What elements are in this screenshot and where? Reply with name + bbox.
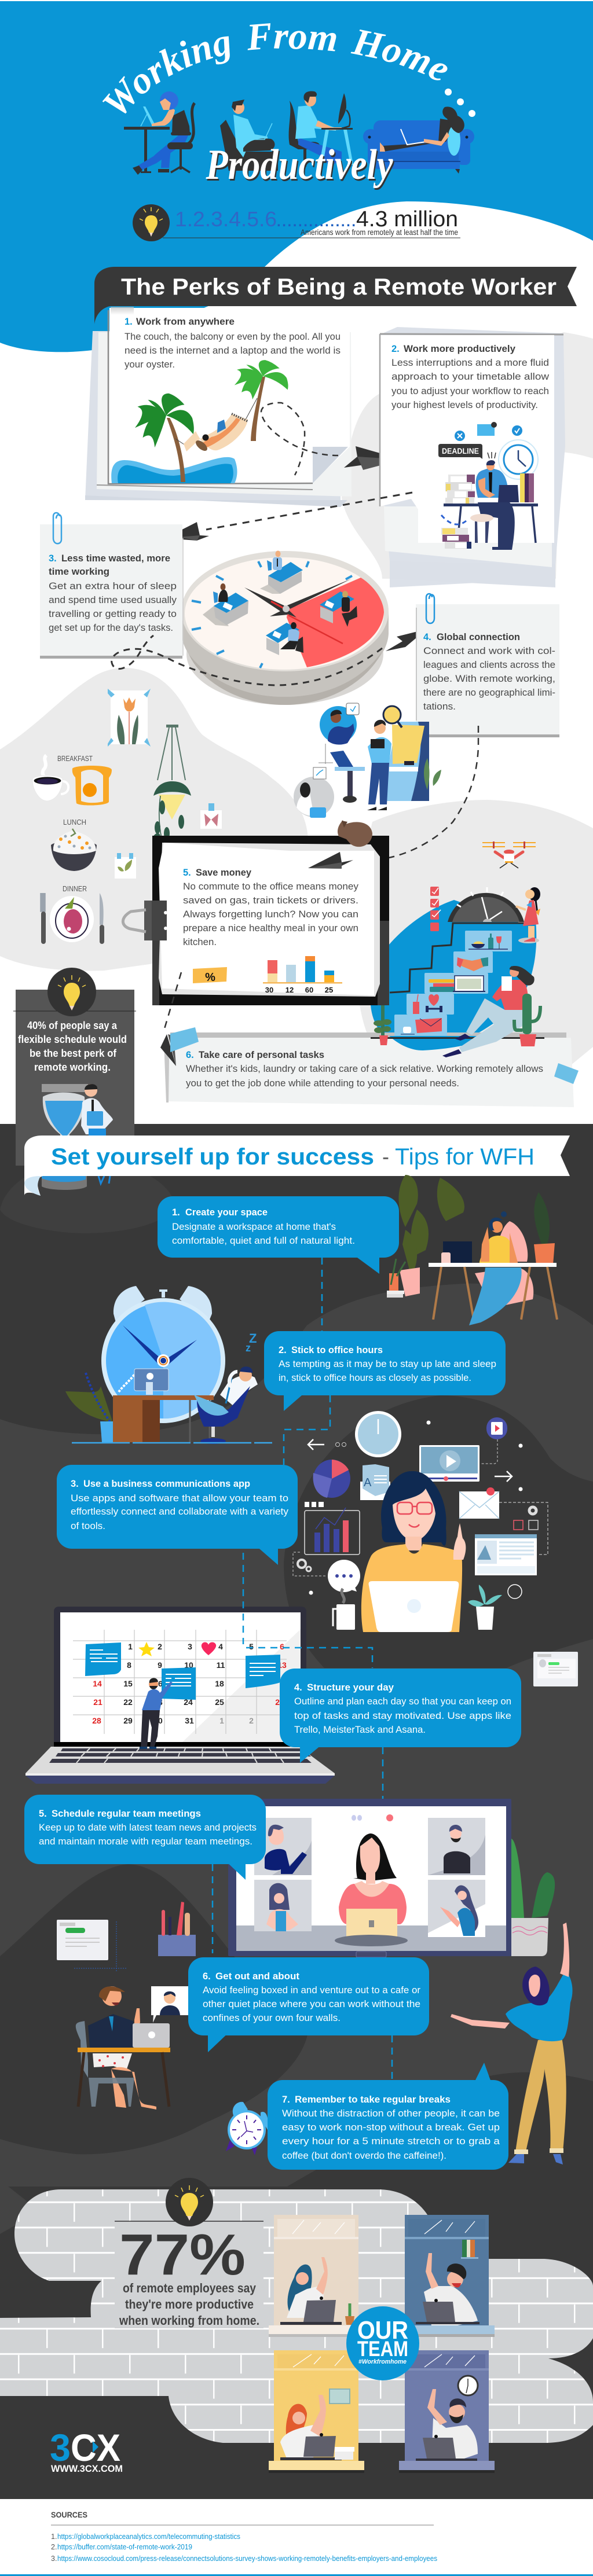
dashed path to perk 3 — [206, 493, 412, 530]
speech bubble: tip 4 structure your day: top of tasks and stay motivated. Use apps like — [294, 1711, 511, 1721]
calendar numbers: 9 — [158, 1660, 162, 1670]
calendar numbers: 4 — [218, 1642, 223, 1651]
illustration: woman at desk — [387, 1175, 557, 1325]
logo: 3CX: CX — [71, 2426, 120, 2469]
illustration: cactus pot — [511, 1839, 555, 1956]
stat: 4.3 million Americans — [133, 204, 460, 241]
dashed connector tip 1 to tip 2 — [321, 1258, 323, 1331]
sources list — [51, 2510, 437, 2563]
speech bubble: tip 6 get out and about: 6. — [203, 1971, 211, 1982]
calendar numbers: 30 — [153, 1716, 163, 1725]
body text: leagues and clients across the — [423, 660, 555, 670]
figure: man on chair with laptop — [220, 100, 278, 171]
sources list: https://www.cosocloud.com/press-release/connectsolutions-survey-shows-working-remotely-benefits-employers-and-employees — [57, 2555, 437, 2563]
speech bubble: tip 3 business communications app: Use apps and software that allow your team to — [71, 1493, 288, 1504]
plants — [374, 994, 540, 1046]
text — [18, 1020, 127, 1073]
calendar numbers: 31 — [185, 1716, 194, 1725]
stat: 77 percent productive: 77% — [119, 2222, 246, 2287]
title: Productively: Productively — [207, 143, 394, 190]
speech bubble: tip 6 get out and about: Avoid feeling boxed in and venture out to a cafe or — [203, 1985, 421, 1996]
man at calendar — [140, 1678, 173, 1749]
body text: Always forgetting lunch? Now you can — [183, 909, 358, 920]
video player — [419, 1417, 507, 1482]
stat: 4.3 million Americans: Americans work from remotely at least half the time — [301, 228, 458, 237]
body text: and spend time used usually — [49, 595, 177, 605]
body text: Less interruptions and a more fluid — [391, 358, 549, 368]
speech bubble: tip 3 business communications app: of tools. — [71, 1521, 105, 1531]
poster: butterfly — [200, 803, 222, 829]
badge: our team: OUR — [357, 2316, 408, 2345]
top blue header shape — [0, 1, 593, 352]
illustration: alarm clock and reclining man: z — [246, 1342, 251, 1354]
speech bubble: tip 7 regular breaks: Remember to take regular breaks — [295, 2094, 451, 2105]
body text: globe. With remote working, — [423, 674, 555, 684]
speech bubble: tip 4 structure your day: Outline and plan each day so that you can keep on — [294, 1696, 511, 1707]
gauge — [448, 887, 524, 922]
illustration: four remote workers — [124, 91, 474, 175]
panel: perk 5 save money clipboard — [123, 820, 389, 1005]
calendar numbers: 1 — [219, 1716, 224, 1725]
panel: perk 6 personal tasks — [160, 1027, 579, 1107]
illustration: pencil cup and chat card — [57, 1902, 196, 1972]
speech bubble: tip 5 team meetings: 5. — [39, 1809, 47, 1819]
body text: travelling or getting ready to — [49, 609, 177, 619]
calendar numbers: 18 — [215, 1679, 224, 1688]
icon: paper clip — [426, 594, 434, 623]
dashed connector tip 5 to tip 6 — [212, 1864, 213, 1953]
tile: top left — [254, 1818, 312, 1875]
calendar numbers: 8 — [127, 1660, 131, 1670]
meal: lunch: LUNCH — [63, 818, 86, 826]
illustration: video meeting monitor — [228, 1799, 511, 1957]
background shape: faint lower-left strip — [0, 2180, 41, 2234]
girl at gauge — [516, 887, 540, 943]
calendar numbers: 3 — [188, 1642, 192, 1651]
heading: 6. — [186, 1050, 194, 1060]
illustration: woman with apps — [293, 1411, 548, 1632]
newspaper envelope: A — [364, 1476, 372, 1489]
speech bubble: tip 2 stick to office hours: in, stick to office hours as closely as possible. — [279, 1373, 471, 1383]
binder clip — [123, 901, 167, 940]
blue blob lower part over shelf — [389, 1036, 501, 1050]
speech bubble: tip 7 regular breaks: coffee (but don't overdo the caffeine!). — [282, 2151, 446, 2161]
dashed path to perk 6 — [163, 972, 181, 1032]
dashed connector tip 6 to tip 7 — [391, 2035, 393, 2080]
body text — [423, 646, 555, 712]
heading: Work more productively — [404, 344, 516, 354]
speech bubble: tip 3 business communications app — [57, 1465, 298, 1565]
meal: dinner — [41, 885, 104, 944]
panel: perk 4 global connection — [416, 594, 559, 737]
shelf items — [401, 934, 508, 1034]
poster: tulip — [108, 689, 151, 747]
sticky note: percent — [193, 967, 227, 984]
speech bubble icon — [328, 1560, 360, 1592]
dashed connector tip 2 to tip 3 — [284, 1395, 330, 1465]
poster: leaf — [115, 853, 136, 879]
logo: 3CX: 3 — [50, 2426, 71, 2469]
bar chart: 60 — [305, 986, 313, 994]
calendar numbers: 13 — [277, 1660, 287, 1670]
body text: No commute to the office means money — [183, 881, 359, 892]
background blob: dark behind woman — [284, 1395, 593, 1668]
cat on clipboard — [338, 820, 372, 847]
title: Working From Home: Working From Home — [102, 23, 447, 113]
calendar numbers: 28 — [92, 1716, 101, 1725]
speech bubble: tip 5 team meetings: and maintain morale with regular team meetings. — [39, 1836, 252, 1847]
meal: breakfast — [32, 755, 112, 806]
body text: your highest levels of productivity. — [391, 400, 538, 410]
sticky note: percent: % — [205, 971, 215, 984]
text: 40% of people say a — [27, 1020, 118, 1031]
sources list: SOURCES — [51, 2510, 87, 2519]
speech bubble: tip 7 regular breaks — [268, 2063, 508, 2170]
speech bubble: tip 3 business communications app: Use a business communications app — [83, 1479, 250, 1489]
heading: Work from anywhere — [136, 317, 235, 327]
dashed path under clock — [112, 635, 382, 685]
heading banner: perks — [94, 267, 577, 324]
body text — [391, 358, 549, 410]
icon: heart — [202, 1642, 216, 1655]
body text: there are no geographical limi- — [423, 688, 555, 698]
calendar numbers: 27 — [275, 1697, 284, 1707]
calendar numbers: 14 — [93, 1679, 102, 1688]
body text — [49, 581, 177, 633]
dashed path to next perk — [261, 403, 338, 475]
arrow: paper plane to perk 4 — [386, 629, 427, 651]
checklist — [430, 887, 441, 931]
background blob: dark lower right — [0, 2072, 593, 2499]
keyboard — [49, 1748, 312, 1763]
clock hands — [244, 579, 352, 644]
clock ticks — [192, 561, 352, 668]
meal: dinner: DINNER — [63, 885, 87, 893]
illustration: man at deadline desk — [438, 422, 538, 550]
speech bubble: tip 6 get out and about: confines of your own four walls. — [203, 2013, 341, 2023]
speech bubble: tip 7 regular breaks: 7. — [282, 2094, 290, 2105]
background blob: grey left — [0, 668, 308, 971]
bar chart: 12 — [285, 986, 294, 994]
heading banner: tips for WFH — [24, 1136, 570, 1196]
tile: bottom right — [428, 1880, 485, 1937]
icon: star — [138, 1642, 155, 1656]
speech bubble: tip 2 stick to office hours — [264, 1331, 506, 1411]
dashed connector tip 4 to tip 5 — [265, 1747, 383, 1812]
dashed path to perk 5 — [352, 726, 478, 860]
calendar grid — [73, 1630, 287, 1734]
body text: need is the internet and a laptop and the world is — [125, 346, 341, 356]
shelf panels — [394, 931, 512, 1036]
stat: 4.3 million Americans: 1.2.3.4.5.6 — [175, 207, 277, 231]
illustration: hourglass and man — [42, 1084, 113, 1157]
text: flexible schedule would — [18, 1034, 127, 1045]
footer strip — [0, 2574, 593, 2576]
woman sitting — [442, 966, 535, 1057]
body text: approach to your timetable allow — [391, 372, 549, 382]
body text: you to get the job done while attending to your personal needs. — [186, 1078, 459, 1089]
speech bubble: tip 4 structure your day: 4. — [294, 1682, 302, 1693]
speech bubble: tip 3 business communications app: effortlessly connect and collaborate with a variety — [71, 1506, 289, 1517]
body text — [125, 332, 341, 370]
heading: 5. — [183, 868, 191, 878]
bar chart: 30 — [265, 986, 273, 994]
illustration: waving woman — [451, 1923, 573, 2165]
sources list: https://globalworkplaceanalytics.com/telecommuting-statistics — [57, 2533, 240, 2541]
window: beige woman — [269, 2215, 366, 2334]
bar chart — [263, 956, 342, 994]
speech bubble: tip 5 team meetings — [24, 1795, 266, 1880]
body text — [183, 881, 359, 947]
stat: 77 percent productive: when working from home. — [119, 2313, 259, 2328]
heading banner: perks: The Perks of Being a Remote Worker — [121, 274, 557, 300]
pie chart — [313, 1460, 350, 1498]
heading: 4. — [423, 632, 431, 642]
stat: 77 percent productive: they're more productive — [125, 2297, 254, 2312]
woman with glasses — [361, 1471, 466, 1632]
body text: tations. — [423, 701, 456, 712]
heading: 2. — [391, 344, 400, 354]
body text: you to adjust your workflow to reach — [391, 386, 549, 396]
badge: our team: #Workfromhome — [358, 2358, 407, 2365]
body text: Get an extra hour of sleep — [49, 581, 177, 591]
heading: Save money — [196, 868, 252, 878]
shelf base line — [371, 1037, 544, 1039]
speech bubble: tip 1 create your space — [158, 1196, 399, 1274]
calendar numbers: 25 — [215, 1697, 224, 1707]
speech bubble: tip 1 create your space: Designate a workspace at home that's — [172, 1222, 336, 1232]
brick wall cloud — [0, 2189, 593, 2443]
logo: 3CX — [50, 2426, 123, 2474]
speech bubble: tip 4 structure your day: Trello, MeisterTask and Asana. — [294, 1725, 426, 1735]
window: yellow woman — [269, 2350, 364, 2470]
calendar numbers: 21 — [93, 1697, 103, 1707]
icon: paper clip — [53, 513, 61, 543]
window: blue man — [405, 2215, 495, 2334]
newspaper envelope — [360, 1464, 390, 1500]
stat: 77 percent productive: of remote employees say — [123, 2281, 257, 2295]
icon: light bulb — [47, 968, 96, 1016]
speech bubble: tip 7 regular breaks: every hour for a 5 minute stretch or to grab a — [282, 2136, 500, 2147]
heading: time working — [49, 567, 109, 577]
calendar numbers: 2 — [249, 1716, 254, 1725]
sources list: https://buffer.com/state-of-remote-work-2019 — [57, 2543, 192, 2551]
background blob: grey right of paper two — [342, 332, 593, 579]
speech bubble: tip 1 create your space: comfortable, quiet and full of natural light. — [172, 1236, 355, 1246]
body text: The couch, the balcony or even by the pool. All you — [125, 332, 341, 342]
stair line — [390, 923, 524, 993]
arrow: paper plane to perk 6 origin — [308, 852, 353, 869]
calendar numbers: 16 — [153, 1679, 163, 1688]
heading banner: tips for WFH: Tips for WFH — [395, 1144, 535, 1170]
calendar numbers: 24 — [184, 1697, 193, 1707]
panel: perk 2 work more productively — [206, 327, 565, 587]
speech bubble: tip 3 business communications app: 3. — [71, 1479, 79, 1489]
heading: Less time wasted, more — [61, 553, 170, 564]
speech bubble: tip 1 create your space: 1. — [172, 1207, 180, 1218]
illustration: beach and hammock — [111, 360, 288, 483]
tile: bottom left — [254, 1880, 312, 1931]
chart box — [305, 1502, 360, 1555]
icon: light bulb — [166, 2178, 213, 2226]
text: be the best perk of — [30, 1048, 117, 1059]
meal: lunch — [51, 818, 97, 871]
illustration: blue blob behind stairs — [371, 900, 536, 1050]
speech bubble: tip 4 structure your day — [280, 1669, 521, 1763]
stat card: 40 percent flexible schedule — [13, 968, 136, 1166]
speech bubble: tip 5 team meetings: Schedule regular team meetings — [52, 1809, 201, 1819]
illustration: alarm clock and reclining man — [65, 1286, 272, 1444]
speech bubble: tip 6 get out and about: other quiet place where you can work without the — [203, 1999, 420, 2009]
arrow: paper plane to perk 3 — [165, 522, 209, 541]
title: Productively: Productively — [206, 141, 393, 189]
speech bubble: tip 2 stick to office hours: Stick to office hours — [291, 1345, 383, 1355]
panel: perk 3 less time wasted — [40, 513, 183, 659]
stat: 4.3 million Americans: 4.3 million — [356, 207, 458, 231]
figure: woman on sofa — [363, 106, 474, 174]
speech bubble: tip 6 get out and about — [188, 1957, 429, 2052]
bar chart: 25 — [325, 986, 333, 994]
illustration: office clock — [181, 551, 389, 705]
heading — [49, 553, 170, 577]
arrows and small marks — [308, 1420, 522, 1595]
speech bubble: tip 2 stick to office hours: As tempting as it may be to stay up late and sleep — [279, 1359, 496, 1369]
dark tips section background — [0, 1124, 593, 2499]
hanging plant — [151, 725, 192, 867]
body text: prepare a nice healthy meal in your own — [183, 923, 358, 934]
background blob: dark top — [0, 1124, 593, 1434]
illustration: hourglass base — [0, 1160, 174, 1233]
tile: top right — [428, 1818, 485, 1875]
calendar numbers: 5 — [249, 1642, 254, 1651]
text: remote working. — [34, 1061, 111, 1073]
drone — [482, 841, 536, 868]
heading banner: tips for WFH: Set yourself up for success — [51, 1144, 374, 1170]
illustration: small alarm clock — [226, 2102, 268, 2155]
icon: light bulb — [133, 204, 170, 241]
speech bubble: tip 2 stick to office hours: 2. — [279, 1345, 287, 1355]
panel: perk 1 work from anywhere — [85, 307, 352, 507]
heading: 3. — [49, 553, 57, 564]
calendar numbers: 11 — [217, 1660, 225, 1670]
illustration: man in shorts on video call — [76, 1986, 188, 2110]
sources list: 2. — [51, 2543, 57, 2551]
illustration: man at deadline desk: DEADLINE — [442, 447, 479, 455]
heading: Global connection — [437, 632, 520, 642]
stat: 4.3 million Americans: ............... — [277, 214, 356, 230]
heading banner: tips for WFH: - — [382, 1144, 389, 1170]
speech bubble: tip 6 get out and about: Get out and about — [215, 1971, 300, 1982]
body text — [186, 1064, 543, 1089]
body text: get set up for the day's tasks. — [49, 623, 173, 633]
illustration: stairs of personal tasks — [371, 841, 544, 1057]
sticky notes — [85, 1642, 280, 1700]
gears — [293, 1507, 538, 1598]
badge: our team: TEAM — [357, 2337, 408, 2361]
wall clock — [355, 1411, 401, 1457]
speech bubble: tip 5 team meetings: Keep up to date with latest team news and projects — [39, 1822, 257, 1833]
sources list: 1. — [51, 2533, 57, 2541]
speech bubble: tip 7 regular breaks: easy to work non-stop without a break. Get up — [282, 2122, 500, 2133]
calendar numbers: 10 — [184, 1660, 193, 1670]
main speaker woman — [335, 1833, 408, 1946]
background blob: grey right — [356, 800, 593, 1065]
stat: 77 percent productive — [115, 2178, 263, 2328]
background blob: dark lower left — [0, 1864, 308, 2154]
logo: 3CX: WWW.3CX.COM — [51, 2463, 123, 2474]
body text: saved on gas, train tickets or drivers. — [183, 895, 358, 906]
illustration: laptop calendar — [25, 1607, 335, 1784]
dashed connector tip 3 to tip 4 — [243, 1553, 372, 1668]
calendar numbers: 22 — [123, 1697, 133, 1707]
arrow: paper plane to perk 2 — [344, 446, 402, 470]
webpage card — [475, 1534, 537, 1575]
badge: our team — [346, 2306, 419, 2380]
body text: kitchen. — [183, 937, 217, 947]
calendar numbers: 2 — [158, 1642, 162, 1651]
plant and mug — [333, 1585, 502, 1630]
sources list: 3. — [51, 2555, 57, 2563]
decorative card: chat — [533, 1652, 578, 1686]
body text: Connect and work with col- — [423, 646, 555, 656]
speech bubble: tip 4 structure your day: Structure your day — [307, 1682, 394, 1693]
meal: breakfast: BREAKFAST — [57, 755, 93, 763]
calendar numbers: 15 — [123, 1679, 133, 1688]
body text: Whether it's kids, laundry or taking care of a sick relative. Working remotely allows — [186, 1064, 543, 1074]
illustration: food and decor — [32, 689, 222, 944]
heading: Take care of personal tasks — [199, 1050, 324, 1060]
body text: your oyster. — [125, 359, 175, 370]
illustration: global connection people — [294, 703, 441, 818]
window: indigo man — [399, 2350, 495, 2470]
illustration: team windows — [269, 2215, 495, 2473]
figure: woman at tablet — [124, 91, 195, 175]
envelope — [459, 1487, 548, 1555]
illustration: alarm clock and reclining man: Z — [249, 1331, 257, 1346]
calendar numbers: 23 — [153, 1697, 163, 1707]
calendar numbers: 29 — [123, 1716, 133, 1725]
calendar numbers: 1 — [128, 1642, 133, 1651]
figure: man at monitor — [289, 91, 353, 167]
calendar numbers — [92, 1642, 287, 1725]
speech bubble: tip 7 regular breaks: Without the distraction of other people, it can be — [282, 2108, 500, 2119]
desks and workers — [203, 551, 357, 655]
speech bubble: tip 1 create your space: Create your space — [185, 1207, 268, 1218]
calendar numbers: 6 — [280, 1642, 284, 1651]
heading: 1. — [125, 317, 133, 327]
